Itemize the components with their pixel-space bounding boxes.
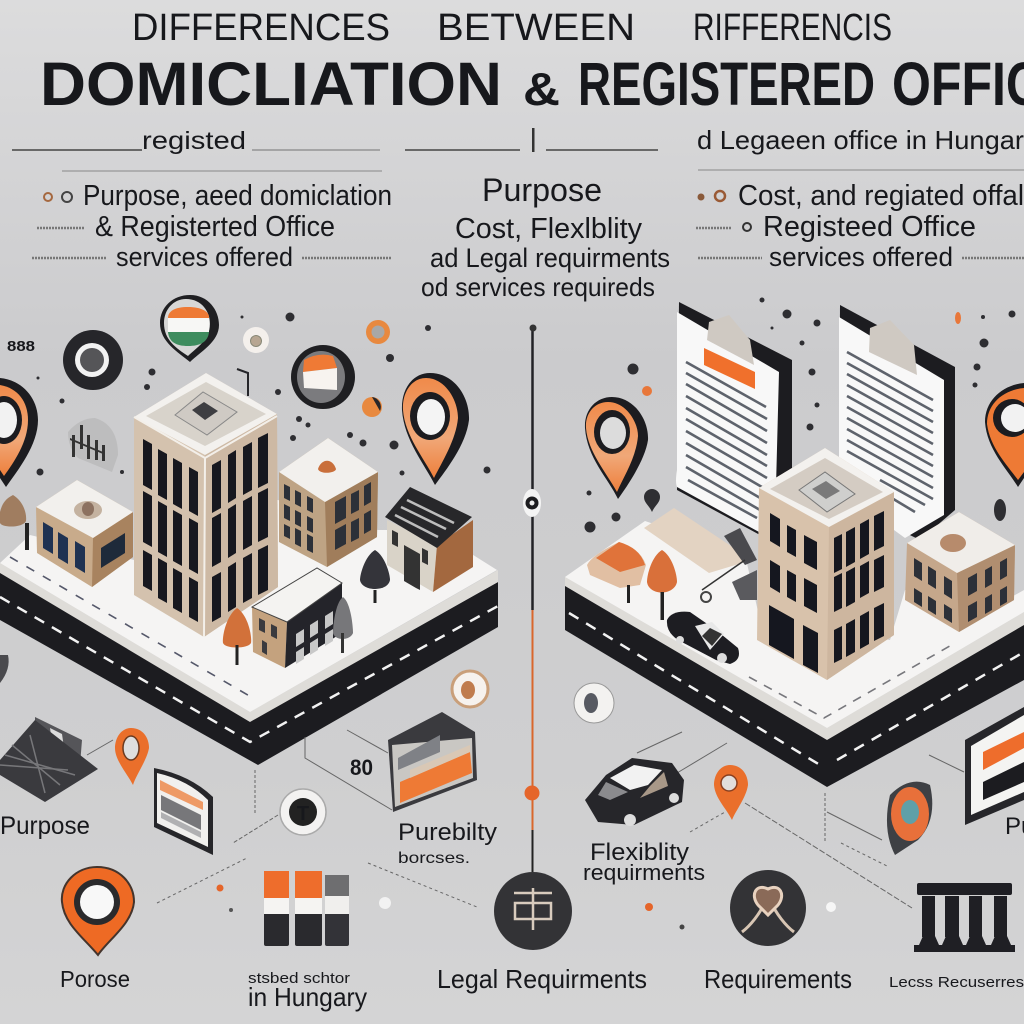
icon: round badge <box>280 789 326 835</box>
icon: columns institution <box>914 883 1015 952</box>
left road dashes <box>0 597 498 742</box>
right clipboard right <box>839 305 955 540</box>
label: in hungary: stsbed schtor <box>248 970 350 987</box>
small building icon <box>68 418 118 472</box>
main title: DOMICLIATION <box>40 50 502 118</box>
left trees <box>0 495 390 665</box>
right subtitle: d Legaeen office in Hungar <box>697 125 1024 155</box>
left platform lip <box>0 563 498 722</box>
right clipboard left <box>676 302 792 535</box>
round flag pin <box>291 345 355 409</box>
right small building <box>905 512 1015 632</box>
icon: small orange badge <box>452 671 488 707</box>
label: in hungary <box>248 970 367 1012</box>
left text block: Purpose, aeed domiclation <box>83 180 392 212</box>
label: flexibility requirements <box>583 839 705 885</box>
icon: car <box>585 758 684 826</box>
icon: flag card right <box>965 707 1024 825</box>
left subtitle: registed <box>142 127 246 155</box>
left platform inner dashes <box>10 557 253 698</box>
small orange tag <box>362 397 382 417</box>
right platform lip <box>565 577 1024 740</box>
icon: black round legal <box>494 872 572 950</box>
icon: small mark: 80 <box>350 755 373 780</box>
center text block <box>421 172 670 302</box>
label: purebility <box>398 819 497 867</box>
left tower building <box>134 373 278 637</box>
label: purpose left: Purpose <box>0 812 90 840</box>
icon: large orange pin <box>62 867 134 955</box>
mark text left: 888 <box>7 338 35 355</box>
icon: round ribbon <box>730 870 806 946</box>
label: porose: Porose <box>60 966 130 992</box>
scattered decorative marks right <box>584 298 1016 532</box>
main title: & <box>523 63 560 115</box>
title line: differences between: DIFFERENCES <box>132 7 390 49</box>
label: in hungary: in Hungary <box>248 982 367 1012</box>
dark roof building <box>385 487 473 592</box>
center divider with nodes <box>523 324 541 872</box>
right main building <box>757 448 894 680</box>
front small building <box>252 568 342 668</box>
icon: orange pin right lower <box>714 765 748 820</box>
connector lines lower section <box>87 730 964 908</box>
right text block: services offered <box>769 242 953 272</box>
map pin: left edge <box>0 378 38 487</box>
map pin: right large <box>585 397 648 499</box>
left text block <box>32 180 392 272</box>
title line: differences between <box>132 7 892 49</box>
center text block: ad Legal requirments <box>430 243 670 273</box>
left isometric road <box>0 572 498 765</box>
right props: bench, stone, dark shapes <box>587 508 757 620</box>
icon: orange pin lower <box>115 728 149 785</box>
label: flexibility requirements: Flexiblity <box>590 839 689 866</box>
right text block: Registeed Office <box>763 211 976 243</box>
left text block: & Registerted Office <box>95 211 335 243</box>
center text block: Purpose <box>482 172 602 208</box>
right platform inner dashes <box>749 643 955 718</box>
icon: laptop <box>0 717 98 802</box>
main title <box>40 50 1024 118</box>
left text block: services offered <box>116 242 293 272</box>
label: purebility: borcses. <box>398 850 470 867</box>
icon: flag stacks <box>264 871 349 946</box>
center tick <box>405 128 658 152</box>
scattered decorative marks left <box>36 312 490 476</box>
icon: card chart <box>154 768 213 855</box>
title line: differences between: BETWEEN <box>437 7 635 49</box>
center text block: od services requireds <box>421 272 655 302</box>
right text block <box>696 180 1024 272</box>
right platform car <box>667 612 739 664</box>
hook mark <box>237 369 248 396</box>
map pin: right edge <box>985 383 1024 487</box>
map pin: Hungary flag <box>160 295 219 362</box>
right road dashes <box>569 613 1024 765</box>
right platform top <box>565 521 1024 728</box>
label: flexibility requirements: requirments <box>583 860 705 885</box>
orange speck right <box>642 312 961 396</box>
label: purebility: Purebilty <box>398 819 497 846</box>
title line: differences between: RIFFERENCIS <box>693 7 892 49</box>
right isometric road <box>565 585 1024 787</box>
icon: folder card <box>388 712 477 812</box>
small orange badge <box>366 320 390 344</box>
label: requirements: Requirements <box>704 964 852 994</box>
main title: REGISTERED <box>578 50 875 118</box>
left small building <box>36 480 133 587</box>
icon: oval target <box>887 782 932 855</box>
round badge left <box>63 330 123 390</box>
left platform top <box>0 500 497 712</box>
mid building <box>279 438 378 567</box>
icon: round badge: T <box>297 803 309 825</box>
lower scatter dots <box>216 884 836 930</box>
icon: round badge right <box>574 683 614 723</box>
label: legal requirements: Legal Requirments <box>437 964 647 994</box>
map pin: left large <box>402 373 469 485</box>
icon: left edge tag <box>0 655 9 683</box>
small badge <box>243 327 269 353</box>
label: faded right: Lecss Recuserres <box>889 974 1024 991</box>
center text block: Cost, Flexlblity <box>455 213 642 245</box>
